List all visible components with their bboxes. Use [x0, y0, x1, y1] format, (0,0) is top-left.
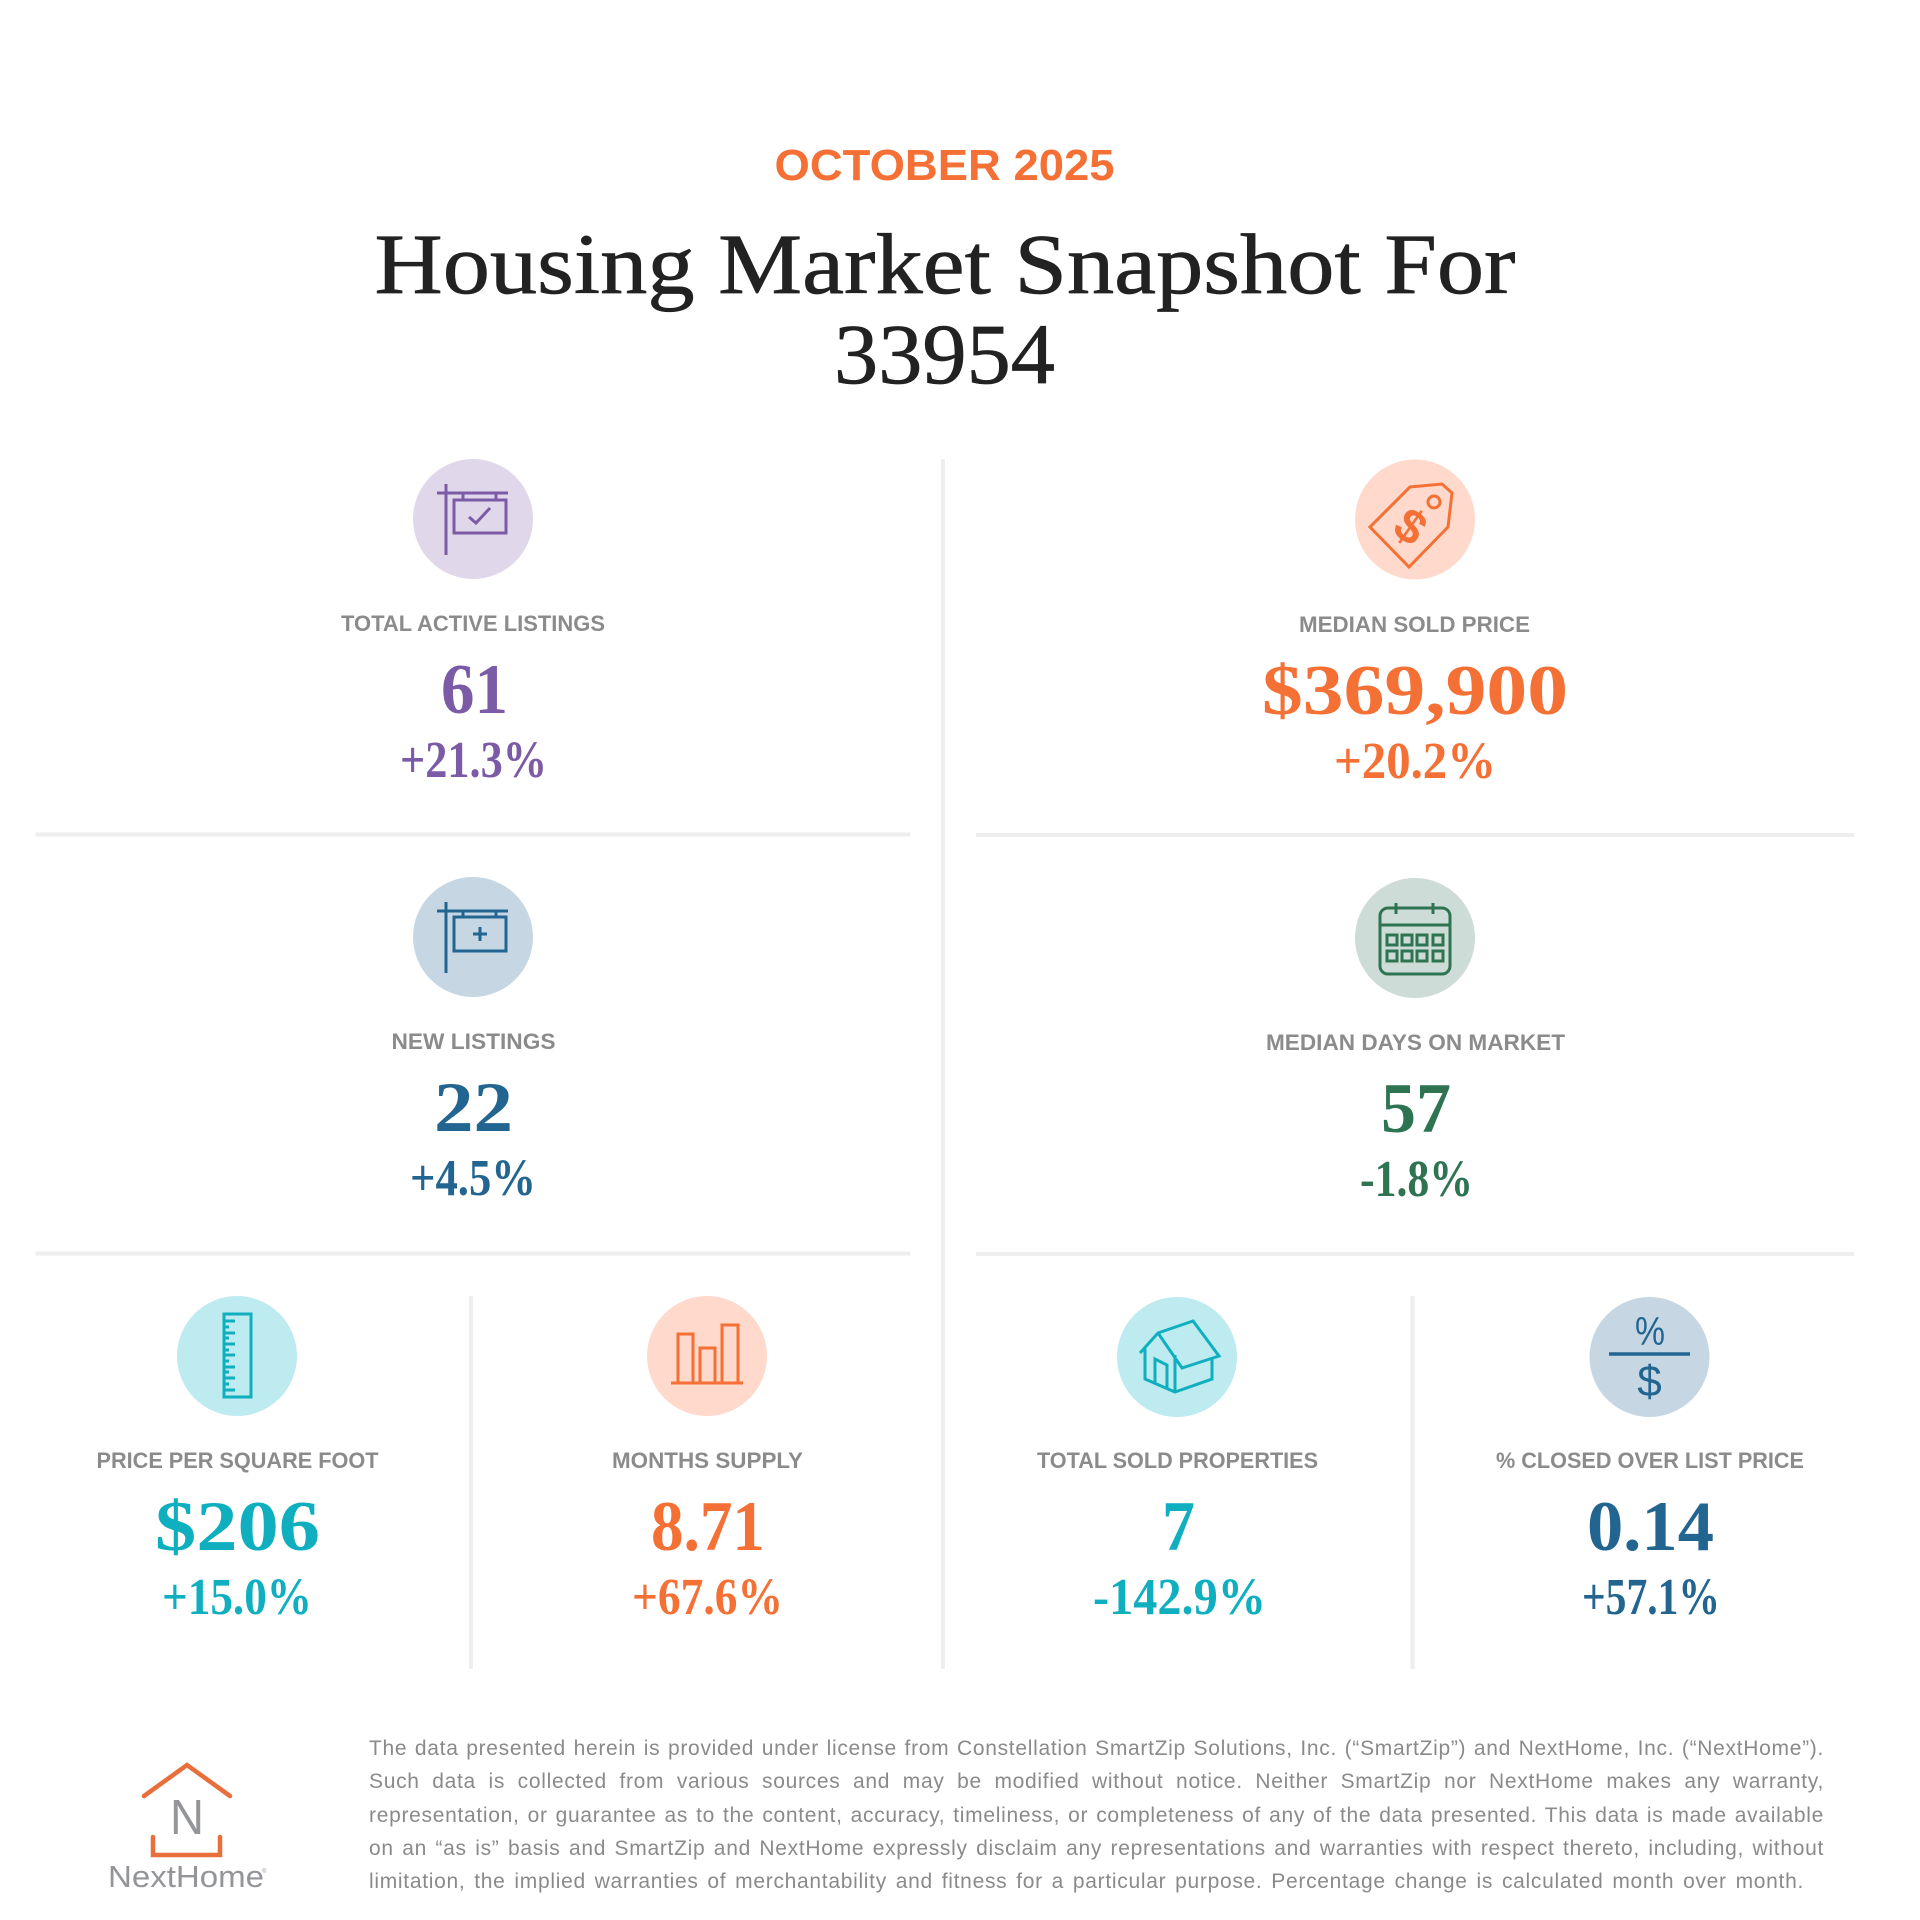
icon: sign with check: [413, 459, 533, 579]
value: 8.71: [651, 1488, 765, 1566]
panel: price per square foot: [96, 1296, 379, 1626]
logo: NextHome: NextHome: [108, 1859, 264, 1894]
panel: new listings: [392, 877, 556, 1207]
logo: NextHome: ®: [262, 1868, 267, 1875]
value: $369,900: [1262, 652, 1568, 730]
change: +15.0%: [162, 1569, 312, 1626]
value: $206: [155, 1488, 320, 1566]
panel: total sold properties: [1037, 1297, 1318, 1626]
change: -1.8%: [1360, 1151, 1473, 1208]
value: 22: [434, 1069, 513, 1147]
disclaimer text: on an “as is” basis and SmartZip and NextHome expressly disclaim any representations and warranties with respect thereto, including, without: [369, 1837, 1824, 1860]
value: 0.14: [1587, 1488, 1714, 1566]
panel: median days on market: [1266, 878, 1566, 1208]
logo: NextHome: [108, 1765, 267, 1894]
date heading: OCTOBER 2025: [774, 141, 1114, 190]
panel: total active listings: [341, 459, 605, 789]
icon: percent over dollar: %: [1635, 1310, 1665, 1354]
label: TOTAL ACTIVE LISTINGS: [341, 611, 605, 636]
icon: ruler: [177, 1296, 297, 1416]
label: TOTAL SOLD PROPERTIES: [1037, 1448, 1318, 1473]
panel: median sold price: [1262, 460, 1568, 790]
title: [374, 216, 1516, 402]
logo: NextHome: N: [170, 1791, 204, 1845]
label: PRICE PER SQUARE FOOT: [96, 1448, 379, 1473]
icon: percent over dollar: $: [1637, 1357, 1662, 1406]
icon: sign with plus: [413, 877, 533, 997]
change: +20.2%: [1334, 733, 1496, 790]
value: 57: [1381, 1070, 1451, 1148]
panel: percent closed over list price: [1496, 1297, 1804, 1626]
label: MEDIAN SOLD PRICE: [1299, 612, 1530, 637]
title: Housing Market Snapshot For: [374, 216, 1516, 312]
change: +4.5%: [410, 1150, 536, 1207]
icon: percent over dollar: [1590, 1297, 1710, 1417]
disclaimer text: The data presented herein is provided under license from Constellation SmartZip Solutions, Inc. (“SmartZip”) and NextHome, Inc. (“NextHome”).: [369, 1737, 1824, 1760]
label: MONTHS SUPPLY: [612, 1448, 803, 1473]
label: MEDIAN DAYS ON MARKET: [1266, 1030, 1566, 1055]
value: 61: [441, 651, 508, 729]
value: 7: [1162, 1488, 1195, 1566]
change: -142.9%: [1093, 1569, 1266, 1626]
icon: house: [1117, 1297, 1237, 1417]
icon: calendar: [1355, 878, 1475, 998]
icon: price tag: [1355, 460, 1475, 580]
change: +67.6%: [632, 1569, 783, 1626]
label: NEW LISTINGS: [392, 1029, 556, 1054]
disclaimer text: limitation, the implied warranties of merchantability and fitness for a particular purpose. Percentage change is calculated month over month.: [369, 1870, 1804, 1893]
change: +57.1%: [1582, 1569, 1720, 1626]
disclaimer text: representation, or guarantee as to the content, accuracy, timeliness, or completeness of any of the data presented. This data is made available: [369, 1804, 1824, 1827]
label: % CLOSED OVER LIST PRICE: [1496, 1448, 1804, 1473]
disclaimer text: Such data is collected from various sources and may be modified without notice. Neither SmartZip nor NextHome makes any warranty,: [369, 1770, 1824, 1793]
change: +21.3%: [400, 732, 547, 789]
icon: price tag: $: [1384, 498, 1437, 557]
disclaimer text: [369, 1737, 1824, 1893]
title: 33954: [834, 306, 1055, 402]
icon: bar chart: [647, 1296, 767, 1416]
panel: months supply: [612, 1296, 803, 1626]
